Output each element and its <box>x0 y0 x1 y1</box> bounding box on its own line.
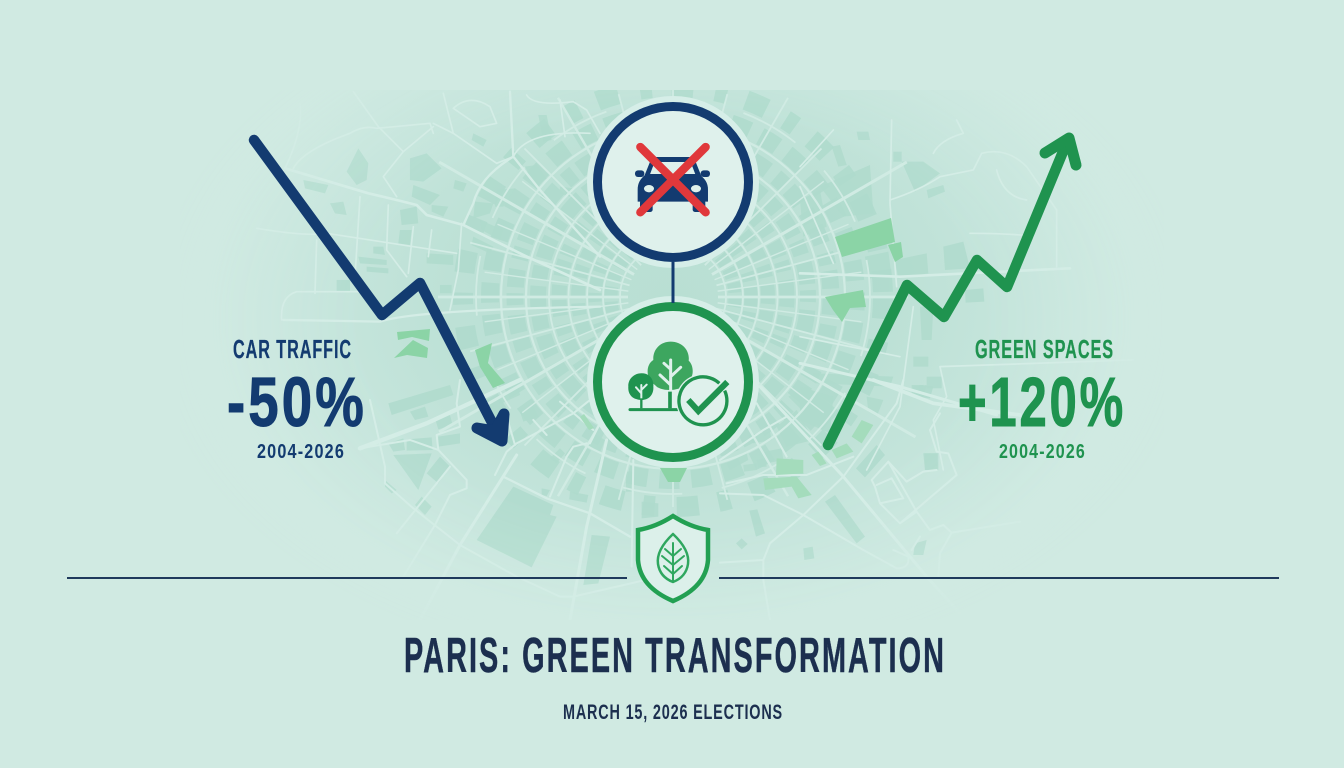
background city map <box>303 90 1034 585</box>
panel: green spaces trend <box>828 138 1126 463</box>
icon: no cars circle <box>587 96 759 268</box>
subtitle: MARCH 15, 2026 ELECTIONS <box>563 701 783 724</box>
icon: trees with check mark <box>628 342 729 427</box>
title: PARIS: GREEN TRANSFORMATION <box>404 629 946 683</box>
icon: leaf <box>658 534 688 582</box>
infographic canvas <box>67 90 1279 722</box>
date range: green spaces: 2004-2026 <box>999 440 1086 463</box>
icon: red cross <box>640 147 706 212</box>
divider line left <box>67 577 627 579</box>
label: car traffic: CAR TRAFFIC <box>233 334 352 364</box>
date range: car traffic: 2004-2026 <box>257 440 345 463</box>
divider line right <box>719 577 1279 579</box>
figure: minus 50 percent: -50% <box>227 363 367 441</box>
icon: car <box>635 157 710 212</box>
connector between circles <box>672 262 674 303</box>
icon: shield with leaf <box>638 516 708 601</box>
arrow: falling car traffic line <box>254 140 504 441</box>
panel: car traffic trend <box>227 140 504 463</box>
label: green spaces: GREEN SPACES <box>975 334 1114 364</box>
arrow: rising green spaces line <box>828 138 1076 445</box>
icon: green trees circle <box>587 296 759 468</box>
figure: plus 120 percent: +120% <box>958 363 1126 441</box>
